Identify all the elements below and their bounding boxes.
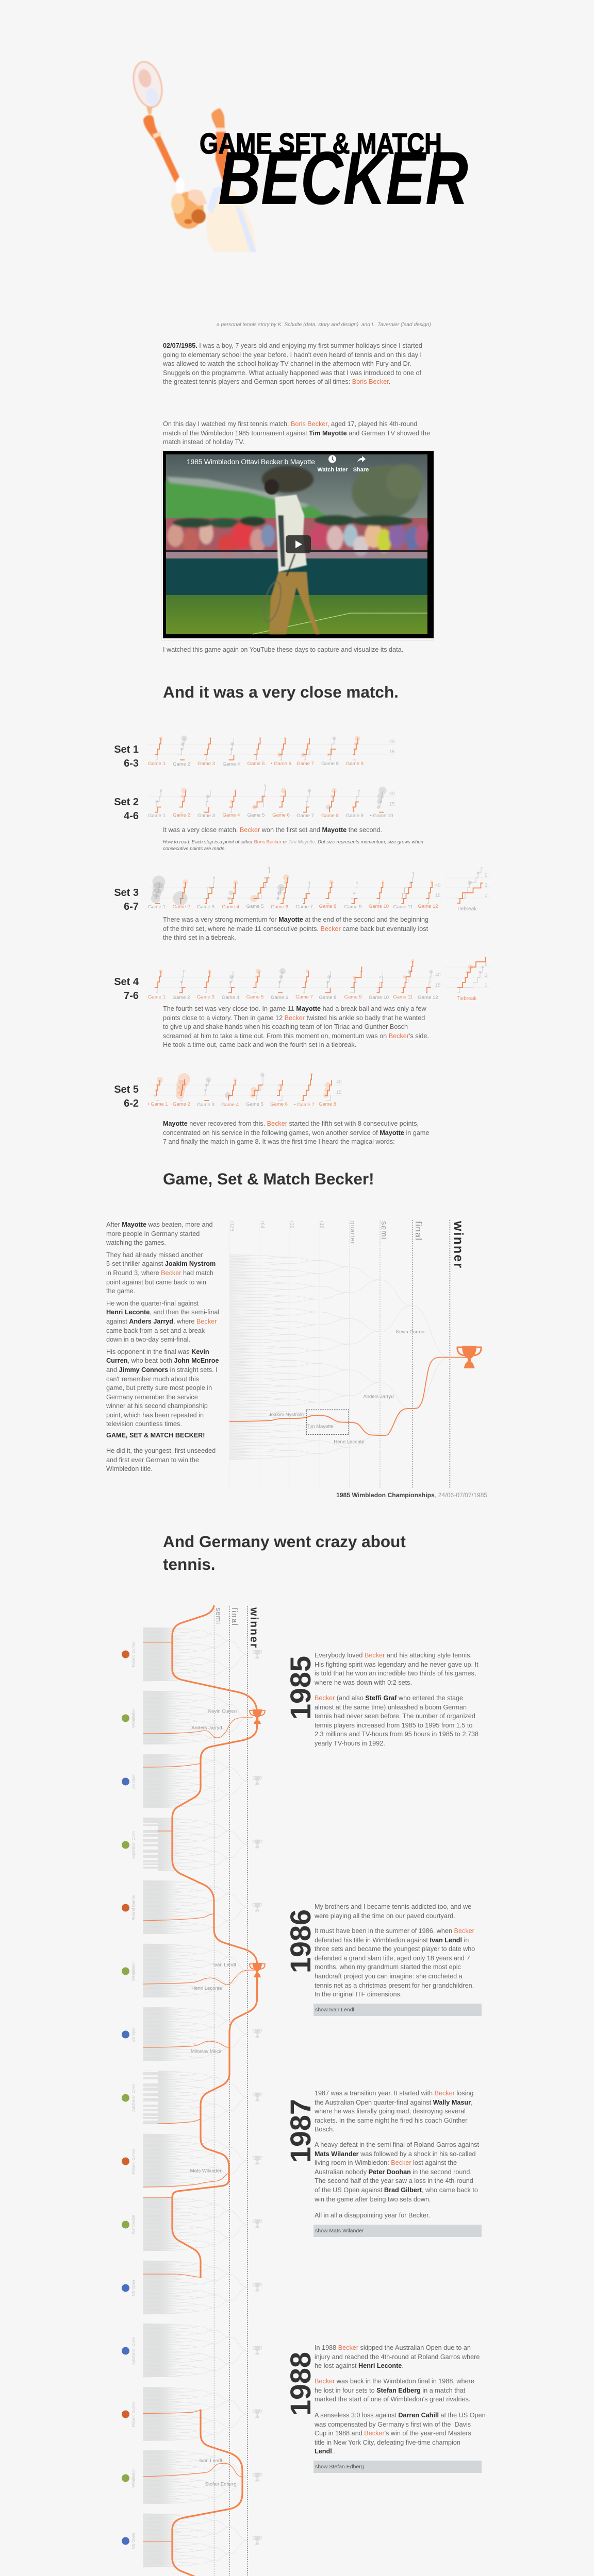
chart: set 5 step charts: Game 4 (221, 1102, 239, 1108)
round labels: r16 (319, 1221, 324, 1229)
set 4 tiebreak chart: 5 (485, 962, 487, 968)
chart: set 4 step charts: Game 10 (369, 995, 389, 1001)
chart: set 5 step charts: Game 5 (246, 1101, 263, 1107)
set 1 score: Set 1 (114, 744, 139, 755)
set 4 tiebreak chart (445, 957, 491, 1002)
text: 1987 part 1: 1987 was a transition year. It started with Becker losing (315, 2090, 473, 2097)
text: 1987 part 1: rackets. In the same night he fired his coach Günther (315, 2117, 468, 2124)
text: 1988 part 3: A senseless 3:0 loss against Darren Cahill at the US Open (315, 2412, 486, 2419)
text: 1987 part 2 (315, 2141, 479, 2203)
tournament surface dots and names: Wimbledon (131, 1708, 136, 1728)
chart: set 4 step charts: Game 2 (173, 995, 190, 1001)
text: 1987 part 1: Bosch. (315, 2126, 335, 2133)
text: 1988 part 1: In 1988 Becker skipped the Australian Open due to an (315, 2344, 471, 2351)
text: set 3: the third set in a tiebreak. (163, 934, 236, 941)
tournament surface dots and names: Australian Open (131, 2084, 136, 2112)
text: tournament story left column (106, 1221, 219, 1428)
button: show Stefan Edberg (314, 2461, 482, 2473)
set 3 tiebreak chart: Tiebreak (457, 906, 477, 912)
text: tournament story left column: down in a two-day semi-final. His opponent in the final was Kevin (106, 1336, 209, 1355)
text: set 3: There was a very strong momentum for Mayotte at the end of the second and the beginning (163, 916, 428, 923)
text: 1988 part 3: title in New York City, defeating five-time champion (315, 2439, 460, 2446)
chart: set 2 step charts: Game 2 (173, 812, 190, 818)
tournament surface dots and names: Roland Garros (131, 2148, 136, 2174)
thin tournament paths (143, 1642, 257, 2576)
tournament surface dots and names: Australian Open (131, 1831, 136, 1859)
text: tournament story left column: point against but came back to win (106, 1279, 206, 1286)
tournament surface dots and names: Australian Open (131, 2337, 136, 2365)
chart: set 2 step charts (148, 784, 395, 819)
year label 1986: 1986 (284, 1909, 317, 1973)
chart: set 4 step charts: 15 (435, 982, 441, 988)
text: 1985 part 2 (315, 1694, 478, 1747)
chart: set 3 step charts: Game 9 (344, 904, 361, 910)
opponent labels: Henri Leconte (191, 1986, 222, 1991)
text: 1987 part 1: where he was literally going mad, destroying several (315, 2108, 466, 2115)
year label 1985: 1985 (284, 1656, 317, 1720)
chart: set 3 step charts: Game 6 (271, 904, 288, 910)
text: 1985 part 1: His fighting spirit was legendary and he never gave up. It (315, 1661, 478, 1668)
text: set 1 and 2: It was a very close match. Becker won the first set and Mayotte the second. (163, 826, 382, 834)
tournament surface dots and names: Roland Garros (131, 1895, 136, 1920)
chart: set 4 step charts: Game 3 (197, 994, 214, 1000)
set 2 score: Set 2 (114, 796, 139, 808)
player labels: Tim Mayotte (307, 1424, 334, 1429)
opponent labels: Miloslav Mecir (191, 2048, 222, 2055)
text: 1988 part 3: was compensated by Germany's first win of the Davis (315, 2421, 471, 2428)
round labels: winner (451, 1221, 466, 1268)
text: 1985 part 1: where he was down with 0:2 sets. (315, 1679, 412, 1686)
text: 1988 part 1: injury and reached the 4th-round at Roland Garros where (315, 2353, 480, 2361)
text: 1987 part 2: A heavy defeat in the semi final of Roland Garros against (315, 2141, 479, 2148)
text: 1987 part 2: Mats Wilander was followed by a shock in his so-called (315, 2150, 476, 2158)
text: 1988 part 3: Lendl.. (315, 2448, 336, 2455)
text: how to read (163, 839, 423, 851)
video title and controls (187, 455, 369, 473)
chart: set 4 step charts: Game 9 (344, 994, 361, 1000)
text: 1986 part 2: months, when my grandmum started the most epic (315, 1963, 461, 1971)
text: intro 02/07/1985 (163, 342, 422, 385)
set 4 score: 7-6 (124, 990, 139, 1002)
text: 1986 part 1: My brothers and I became tennis addicted too, and we (315, 1903, 471, 1910)
round labels: quarter (349, 1221, 356, 1244)
set 2 score: 4-6 (124, 810, 139, 822)
title: BECKER: BECKER (218, 136, 468, 220)
text: 1987 part 2: The second half of the year saw a loss in the 4th-round (315, 2177, 473, 2184)
text: 1985 part 1: Everybody loved Becker and his attacking style tennis. (315, 1652, 472, 1659)
text: intro 02/07/1985: going to elementary school the year before. I hadn't even heard of tennis and on this day I (163, 351, 422, 359)
player labels: Kevin Curren (396, 1329, 424, 1335)
chart: set 1 step charts: 40 (389, 739, 395, 744)
play button (286, 535, 311, 553)
text: youngest winner: He did it, the youngest, first unseeded (106, 1447, 216, 1454)
chart: set 5 step charts (147, 1073, 342, 1108)
heading: Germany went crazy: tennis. (163, 1555, 216, 1573)
chart: set 3 step charts: 40 (435, 883, 441, 888)
chart: set 5 step charts: 40 (336, 1079, 342, 1085)
text: 1985 part 2: Becker (and also Steffi Graf who entered the stage (315, 1694, 463, 1702)
text: tournament story left column: Curren, who beat both John McEnroe (106, 1357, 219, 1364)
video still: 1985 Wimbledon match (161, 450, 434, 640)
text: tournament story left column: and Jimmy Connors in straight sets. I (106, 1366, 218, 1374)
title: GAME SET & MATCH: GAME SET & MATCH (200, 127, 442, 160)
tournament surface dots and names (122, 1641, 136, 2576)
chart: set 3 step charts: Game 3 (197, 904, 214, 910)
text: first match: match of the Wimbledon 1985 tournament against Tim Mayotte and German TV showed the (163, 430, 430, 437)
opponent labels: Mats Wilander (190, 2168, 221, 2174)
text: tournament story left column: against Anders Jarryd, where Becker (106, 1318, 217, 1325)
set 4 tiebreak chart: 3 (485, 973, 487, 978)
chart: set 2 step charts: Game 9 (346, 813, 364, 819)
text: youngest winner: and first ever German to win the (106, 1456, 199, 1464)
thick career path (172, 1606, 257, 2576)
text: 1988 part 2 (315, 2378, 474, 2403)
chart: set 3 step charts: 15 (435, 893, 441, 899)
text: tournament story left column: After Mayotte was beaten, more and (106, 1221, 213, 1228)
set 1 score: 6-3 (124, 758, 139, 769)
text: 1985 part 2: tennis had never seen before. The number of organized (315, 1713, 475, 1720)
chart: set 5 step charts: Game 8 (319, 1101, 336, 1107)
set 4 score: Set 4 (114, 976, 139, 988)
set 2 score (114, 796, 139, 822)
timeline guide lines and labels: semi (214, 1607, 223, 1624)
text: 1987 part 1: the Australian Open quarter-final against Wally Masur, (315, 2099, 473, 2106)
set 5 score: 6-2 (124, 1098, 139, 1109)
text: video caption: I watched this game again on YouTube these days to capture and visualize its data. (163, 646, 403, 653)
chart: set 5 step charts: Game 6 (270, 1101, 288, 1107)
set 3 tiebreak chart: 5 (485, 873, 487, 878)
round guide lines (229, 1220, 450, 1488)
chart: set 5 step charts: Game 2 (173, 1101, 190, 1107)
player labels: Joakim Nystrom (269, 1412, 304, 1418)
player labels (269, 1329, 424, 1445)
video title and controls: Watch later (318, 467, 348, 473)
chart: set 1 step charts: 15 (389, 749, 395, 755)
chart: set 1 step charts: Game 4 (223, 761, 240, 767)
chart: set 5 step charts: • Game 7 (294, 1102, 315, 1108)
text: tournament story left column: in Round 3, where Becker had match (106, 1269, 213, 1277)
text: youngest winner (106, 1447, 216, 1472)
text: tournament story left column: game, but pretty sure most people in (106, 1384, 212, 1392)
set 5 score (114, 1084, 139, 1109)
chart: set 1 step charts: Game 5 (248, 761, 265, 767)
bracket chart caption: 1985 Wimbledon Championships, 24/06-07/07/1985 (336, 1492, 487, 1499)
chart: set 1 step charts: Game 8 (321, 761, 339, 767)
chart: set 4 step charts: Game 6 (271, 995, 288, 1001)
opponent labels (186, 1708, 237, 2576)
button: show Ivan Lendl: show Ivan Lendl (315, 2007, 354, 2013)
heading: close match: And it was a very close match. (163, 683, 399, 701)
text: set 4: points close to a victory. Then in game 12 Becker twisted his ankle so badly that he wanted (163, 1014, 425, 1022)
opponent labels: Stefan Edberg (205, 2481, 236, 2487)
chart: set 2 step charts: 40 (389, 791, 395, 796)
set 3 score (114, 887, 139, 912)
heading: Germany went crazy: And Germany went crazy about (163, 1532, 406, 1551)
set 3 tiebreak chart: 1 (485, 893, 487, 899)
chart: set 3 step charts: Game 4 (222, 904, 239, 910)
set 1 score (114, 744, 139, 769)
text: first match: match instead of holiday TV. (163, 438, 244, 446)
video title and controls: Share (353, 467, 369, 473)
chart: set 5 step charts: Game 3 (197, 1102, 214, 1108)
bracket chart: 1985 Wimbledon Championships (229, 1220, 481, 1488)
opponent labels: Ivan Lendl (213, 1962, 236, 1968)
text: set 5: 7 and finally the match in game 8. It was the first time I heard the magical words: (163, 1138, 395, 1145)
text: set 4: He took a time out, came back and won the fourth set in a tiebreak. (163, 1041, 356, 1048)
tournament surface dots and names: Roland Garros (131, 2401, 136, 2427)
gaps in small draws (143, 1823, 158, 2121)
chart: set 3 step charts (148, 867, 491, 912)
year label 1987: 1987 (284, 2099, 317, 2163)
set 3 score: Set 3 (114, 887, 139, 899)
text: tournament story left column: watching the games. They had already missed another (106, 1239, 203, 1259)
text: set 4: screamed at him to take a time out. From this moment on, momentum was on Becker's side. (163, 1032, 429, 1040)
chart: set 2 step charts: Game 7 (296, 813, 314, 819)
text: set 5: concentrated on his service in the following games, won another service of Mayotte in game (163, 1129, 429, 1137)
tournament surface dots and names: US Open (131, 2280, 136, 2296)
text: how to read: How to read: Each step is a point of either Boris Becker or Tim Mayotte. Dot size represents momentum, size grows when (163, 839, 423, 844)
text: 1985 part 2: yearly TV-hours in 1992. (315, 1740, 385, 1747)
chart: set 1 step charts: Game 3 (197, 761, 215, 767)
timeline guide lines and labels: final (230, 1607, 239, 1625)
button: show Ivan Lendl (314, 2004, 482, 2016)
chart: set 2 step charts: Game 5 (248, 812, 265, 818)
gray trophies: tournaments not won (253, 1650, 262, 2576)
becker path (229, 1357, 467, 1435)
chart: set 5 step charts: • Game 1 (147, 1101, 168, 1107)
round labels (229, 1221, 466, 1268)
set 4 score (114, 976, 139, 1002)
text: 1988 part 3 (315, 2412, 486, 2455)
byline: a personal tennis story by K. Schulte (data, story and design) and L. Tavernier (lead design) (217, 322, 431, 328)
text: youngest winner: Wimbledon title. (106, 1465, 153, 1472)
player labels: Henri Leconte (334, 1439, 365, 1445)
opponent labels: Ivan Lendl (200, 2458, 222, 2464)
text: set 4: to give up and shake hands when his coaching team of Ion Tiriac and Gunther Bosch (163, 1023, 408, 1030)
left arm (143, 115, 180, 183)
chart: set 1 step charts: Game 7 (296, 761, 314, 767)
timeline guide lines and labels (214, 1606, 260, 2576)
chart: set 3 step charts: Game 5 (246, 904, 263, 909)
chart: set 2 step charts: • Game 10 (370, 813, 393, 819)
chart: set 4 step charts: Game 12 (418, 995, 438, 1001)
text: tournament story left column: Germany remember the service (106, 1394, 198, 1401)
right arm (211, 108, 225, 129)
text: tournament story left column: 5-set thriller against Joakim Nystrom (106, 1260, 216, 1267)
chart: set 2 step charts: Game 1 (148, 813, 166, 819)
text: 1985 part 1 (315, 1652, 478, 1686)
bracket tree (229, 1254, 450, 1460)
set 3 score: 6-7 (124, 901, 139, 912)
text: set 3: of the third set, where he made 11 consecutive points. Becker came back but eventually lost (163, 925, 428, 933)
set 3 tiebreak chart (445, 868, 491, 912)
text: 1986 part 2: defended a grand slam title, aged only 18 years and 7 (315, 1955, 470, 1962)
round labels: r32 (289, 1221, 294, 1229)
text: set 4: The fourth set was very close too. In game 11 Mayotte had a break ball and was only a few (163, 1005, 426, 1012)
set 4 tiebreak chart: 1 (485, 982, 487, 988)
text: 1986 part 2: tennis net as a christmas present for her grandchildren. (315, 1982, 474, 1989)
set 3 tiebreak chart: 3 (485, 883, 487, 888)
text: intro 02/07/1985: the greatest tennis players and German sport heroes of all times: Boris Becker. (163, 378, 390, 385)
text: 1985 part 2: almost at the same time) unleashed a boom German (315, 1704, 467, 1711)
text: tournament story left column: winner at his second championship (106, 1402, 208, 1410)
text: tournament story left column: television countless times. (106, 1420, 182, 1428)
text: intro 02/07/1985: was allowed to watch the school holiday TV channel in the afternoon with Fury and Dr. (163, 360, 411, 367)
button: show Mats Wilander (314, 2225, 482, 2237)
chart: set 4 step charts (148, 957, 491, 1002)
text: 1988 part 2: marked the start of one of Wimbledon's great rivalries. (315, 2396, 470, 2403)
text: 1988 part 2: he lost in four sets to Stefan Edberg in a match that (315, 2387, 465, 2394)
text: 1988 part 1: he lost against Henri Leconte. (315, 2362, 404, 2369)
chart: set 1 step charts: Game 1 (148, 761, 166, 767)
text: 1986 part 2 (315, 1927, 475, 1998)
chart: set 2 step charts: Game 6 (272, 812, 290, 818)
heading: Game, Set & Match Becker: Game, Set & Match Becker! (163, 1170, 374, 1188)
torso (206, 181, 256, 252)
bracket timeline: grand slam careers 1985-1989 (122, 1606, 265, 2576)
chart: set 1 step charts: • Game 6 (271, 761, 291, 767)
timeline guide lines and labels: winner (248, 1607, 260, 1648)
text: 1987 part 2: Australian nobody Peter Doohan in the second round. (315, 2168, 472, 2176)
text: 1986 part 1 (315, 1903, 471, 1920)
chart: set 1 step charts: Game 2 (173, 761, 190, 767)
text: set 3 (163, 916, 428, 941)
chart: set 2 step charts: 15 (389, 802, 395, 807)
chart: set 1 step charts (148, 736, 395, 767)
player labels: Anders Jarryd (363, 1394, 394, 1399)
year label 1988: 1988 (284, 2352, 317, 2416)
button: show Mats Wilander: show Mats Wilander (315, 2228, 364, 2234)
chart: set 3 step charts: Game 12 (418, 904, 438, 909)
text: 1985 part 2: 2.3 millions and TV-hours from 95 hours in 1985 to 2,738 (315, 1731, 478, 1738)
tournament surface dots and names: US Open (131, 2533, 136, 2549)
chart: set 4 step charts: Game 4 (222, 995, 239, 1001)
text: 1987 part 2: win the game after being two sets down. (315, 2196, 431, 2203)
text: 1985 part 1: is told that he won an incredible two thirds of his games, (315, 1670, 476, 1677)
chart: set 3 step charts: Game 11 (393, 904, 413, 910)
text: tournament story left column: came back from a set and a break (106, 1327, 205, 1334)
text: intro 02/07/1985: Snuggels on the programme. What actually happened was that I was introduced to one of (163, 369, 421, 377)
text: 1986 part 2: defended his title in Wimbledon against Ivan Lendl in (315, 1937, 469, 1944)
text: game set and match line: GAME, SET & MATCH BECKER! (106, 1432, 205, 1439)
chart: set 3 step charts: Game 8 (319, 904, 336, 909)
tournament surface dots and names: Roland Garros (131, 1641, 136, 1667)
opponent labels: Kevin Curren (208, 1708, 237, 1715)
chart: set 3 step charts: Game 10 (369, 904, 389, 909)
video title and controls: 1985 Wimbledon Ottavi Becker b Mayotte (187, 457, 315, 466)
text: tournament story left column: Henri Leconte, and then the semi-final (106, 1309, 219, 1316)
text: 1988 part 3: Cup in 1988 and Becker's win of the year-end Masters (315, 2430, 471, 2437)
tournament surface dots and names: US Open (131, 2027, 136, 2042)
text: first match (163, 420, 430, 446)
text: tournament story left column: point, which has been repeated in (106, 1412, 204, 1419)
chart: set 2 step charts: Game 8 (321, 813, 339, 819)
tournament brackets (143, 1628, 248, 2576)
text: set 5 (163, 1120, 429, 1145)
text: tournament story left column: more people in Germany started (106, 1230, 200, 1238)
highlight box: Mayotte match (306, 1410, 349, 1434)
tournament surface dots and names: Wimbledon (131, 1961, 136, 1981)
text: 1987 part 1 (315, 2090, 473, 2133)
text: how to read: consecutive points are made. (163, 845, 226, 851)
round labels: r64 (259, 1221, 265, 1229)
chart: set 5 step charts: 15 (336, 1090, 342, 1095)
chart: set 4 step charts: 40 (435, 972, 441, 978)
set 5 score: Set 5 (114, 1084, 139, 1095)
text: 1988 part 2: Becker was back in the Wimbledon final in 1988, where (315, 2378, 474, 2385)
text: 1987 part 3: All in all a disappointing year for Becker. (315, 2212, 430, 2219)
chart: set 4 step charts: Game 1 (148, 994, 166, 1000)
racket (129, 59, 167, 114)
tournament surface dots and names: Wimbledon (131, 2468, 136, 2488)
chart: set 4 step charts: Game 8 (319, 995, 336, 1001)
tournament surface dots and names: Wimbledon (131, 2215, 136, 2234)
text: 1987 part 2: of the US Open against Brad Gilbert, who came back to (315, 2187, 478, 2194)
chart: set 3 step charts: Game 7 (295, 904, 313, 910)
chart: set 2 step charts: Game 4 (223, 812, 240, 818)
button: show Stefan Edberg: show Stefan Edberg (315, 2464, 364, 2470)
set 4 tiebreak chart: Tiebreak (457, 996, 477, 1002)
chart: set 4 step charts: Game 11 (393, 994, 413, 1000)
round labels: r128 (229, 1221, 235, 1231)
chart: set 4 step charts: Game 7 (295, 994, 313, 1000)
text: tournament story left column: the game. He won the quarter-final against (106, 1287, 199, 1307)
chart: set 3 step charts: Game 2 (173, 904, 190, 910)
text: set 4 (163, 1005, 429, 1048)
round labels: semi (380, 1221, 388, 1239)
trophy: winner (457, 1346, 481, 1368)
illustration: tennis player serving (129, 59, 256, 252)
text: 1985 part 2: tennis players increased from 1985 to 1995 from 1.5 to (315, 1722, 472, 1729)
text: set 5: Mayotte never recovered from this. Becker started the fifth set with 8 consecutive points, (163, 1120, 419, 1127)
text: intro 02/07/1985: 02/07/1985. I was a boy, 7 years old and enjoying my first summer holidays since I started (163, 342, 422, 349)
heading: Germany went crazy (163, 1532, 406, 1573)
orange trophies: tournaments won (250, 1709, 265, 2576)
text: tournament story left column: can't remember much about this (106, 1376, 199, 1383)
text: 1986 part 2: In the original ITF dimensions. (315, 1991, 402, 1998)
opponent labels: Anders Jarryd (191, 1725, 222, 1731)
text: 1988 part 1 (315, 2344, 480, 2369)
round labels: final (414, 1221, 423, 1240)
chart: set 3 step charts: Game 1 (148, 904, 166, 910)
text: 1986 part 2: It must have been in the summer of 1986, when Becker (315, 1927, 474, 1935)
text: 1986 part 1: were playing all the time on our paved courtyard. (315, 1912, 455, 1920)
text: 1987 part 2: living room in Wimbledon: Becker lost against the (315, 2159, 457, 2166)
chart: set 4 step charts: Game 5 (246, 994, 263, 1000)
text: 1986 part 2: three sets and became the youngest player to date who (315, 1945, 475, 1953)
text: first match: On this day I watched my first tennis match. Boris Becker, aged 17, played his 4th-round (163, 420, 417, 428)
text: 1986 part 2: handcraft project you can imagine: she crocheted a (315, 1973, 463, 1980)
chart: set 1 step charts: Game 9 (346, 761, 364, 767)
chart: set 2 step charts: Game 3 (197, 813, 215, 819)
player in the video (260, 479, 320, 634)
tournament surface dots and names: US Open (131, 1774, 136, 1789)
head (174, 192, 204, 229)
